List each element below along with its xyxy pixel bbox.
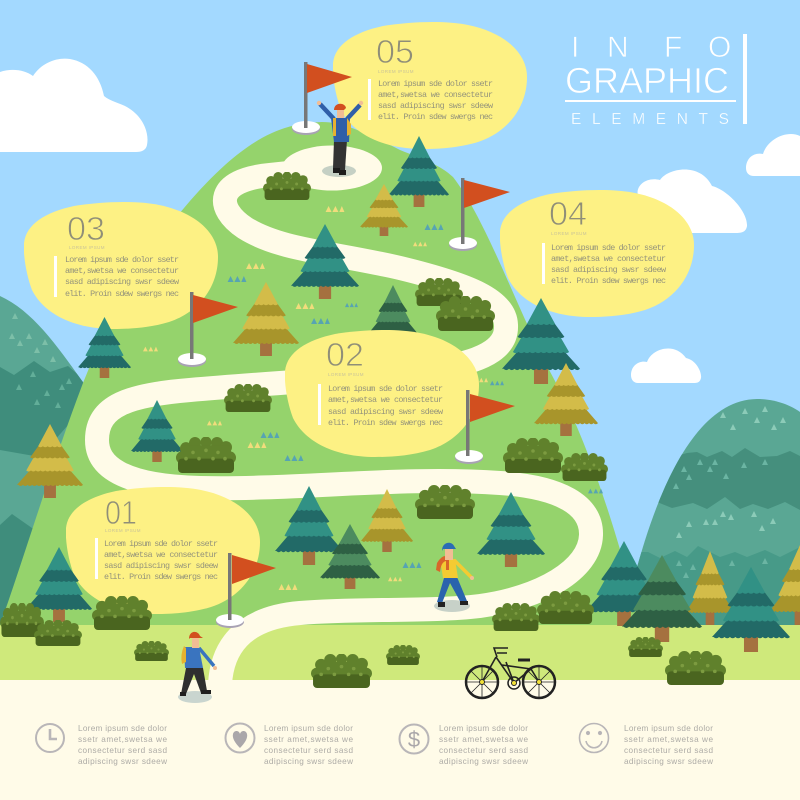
accent bar 01 [95, 538, 98, 579]
cloud: small centre right [631, 348, 701, 383]
panel: step 05 [333, 22, 527, 149]
flag 04 [449, 178, 510, 251]
bushes [0, 172, 726, 688]
hiker walking on trail [434, 543, 474, 612]
accent bar 05 [368, 79, 371, 120]
panel: step 02 [285, 330, 479, 457]
icon: dollar: $ [408, 727, 420, 752]
label 05: LOREM IPSUM [378, 69, 414, 74]
icon: dollar [400, 724, 428, 754]
title: GRAPHIC [565, 60, 729, 101]
text 05: sasd adipiscing swsr sdeew [378, 101, 493, 111]
text 05: amet,swetsa we consectetur [378, 90, 493, 100]
footer text 3: consectetur serd sasd [439, 746, 528, 755]
text 02: Lorem ipsum sde dolor ssetr [328, 384, 443, 394]
text 02: elit. Proin sdew swergs nec [328, 418, 443, 428]
label 04: LOREM IPSUM [551, 231, 587, 236]
flag 01 [216, 553, 276, 628]
footer text 3 [439, 724, 528, 766]
flag 05 [292, 62, 352, 135]
accent bar 04 [542, 243, 545, 284]
cloud: top left [0, 59, 148, 152]
text 02 [328, 384, 443, 428]
text 03: Lorem ipsum sde dolor ssetr [65, 255, 179, 265]
text 04: Lorem ipsum sde dolor ssetr [551, 243, 666, 253]
background mountains right [638, 399, 800, 625]
footer text 2 [264, 724, 353, 766]
winding trail [97, 146, 591, 684]
footer text 1: consectetur serd sasd [78, 746, 167, 755]
text 01 [104, 539, 218, 582]
cloud: right [638, 170, 747, 233]
flag 02 [455, 390, 515, 464]
text 05: elit. Proin sdew swergs nec [378, 112, 493, 122]
footer text 4: ssetr amet,swetsa we [624, 735, 713, 744]
hiker on foreground trail [178, 632, 217, 703]
text 03: elit. Proin sdew swergs nec [65, 289, 179, 299]
tree group: pines on hill [17, 136, 598, 622]
footer text 1: ssetr amet,swetsa we [78, 735, 167, 744]
panel: step 03 [24, 202, 218, 329]
title: ELEMENTS [571, 111, 729, 128]
text 03: sasd adipiscing swsr sdeew [65, 277, 179, 287]
icon: clock [36, 724, 64, 752]
tree group: foreground right [586, 541, 800, 652]
flag 03 [178, 292, 238, 367]
text 03: amet,swetsa we consectetur [65, 266, 179, 276]
footer text 4: Lorem ipsum sde dolor [624, 724, 713, 733]
footer text 3: ssetr amet,swetsa we [439, 735, 528, 744]
text 02: sasd adipiscing swsr sdeew [328, 407, 443, 417]
text 01: amet,swetsa we consectetur [104, 550, 218, 560]
text 02: amet,swetsa we consectetur [328, 395, 443, 405]
footer text 3: adipiscing swsr sdeew [439, 757, 528, 766]
text 05 [378, 79, 493, 122]
footer text 2: consectetur serd sasd [264, 746, 353, 755]
icon: smiley [580, 724, 608, 752]
footer text 1: Lorem ipsum sde dolor [78, 724, 167, 733]
label 02: LOREM IPSUM [328, 372, 364, 377]
footer text 4: adipiscing swsr sdeew [624, 757, 713, 766]
small grass triangles [143, 206, 603, 590]
icon: bicycle [466, 648, 555, 698]
footer text 2: Lorem ipsum sde dolor [264, 724, 353, 733]
title [565, 31, 747, 128]
title: INFO [571, 31, 731, 64]
text 01: Lorem ipsum sde dolor ssetr [104, 539, 218, 549]
panel: step 04 [500, 190, 694, 317]
number 04: 04 [549, 195, 587, 232]
text 05: Lorem ipsum sde dolor ssetr [378, 79, 493, 89]
text 03 [65, 255, 179, 299]
number 05: 05 [376, 33, 414, 70]
number 02: 02 [326, 336, 364, 373]
hiker at summit with arms raised [317, 101, 363, 177]
text 04 [551, 243, 666, 286]
main hill [0, 122, 640, 625]
tree behind step 02 panel [369, 285, 417, 343]
accent bar 02 [318, 384, 321, 425]
icon: heart [226, 724, 254, 752]
foreground meadow [0, 625, 800, 681]
number 03: 03 [67, 210, 105, 247]
number 01: 01 [105, 494, 137, 531]
text 04: amet,swetsa we consectetur [551, 254, 666, 264]
text 01: elit. Proin sdew swergs nec [104, 572, 218, 582]
background mountains left [0, 296, 84, 625]
cloud: far right [746, 134, 800, 176]
panel: step 01 [66, 487, 260, 614]
footer text 4 [624, 724, 713, 766]
ground strip [0, 680, 800, 800]
footer text 2: ssetr amet,swetsa we [264, 735, 353, 744]
text 04: sasd adipiscing swsr sdeew [551, 265, 666, 275]
footer text 3: Lorem ipsum sde dolor [439, 724, 528, 733]
footer text 4: consectetur serd sasd [624, 746, 713, 755]
label 03: LOREM IPSUM [69, 245, 105, 250]
label 01: LOREM IPSUM [105, 528, 141, 533]
text 04: elit. Proin sdew swergs nec [551, 276, 666, 286]
footer text 2: adipiscing swsr sdeew [264, 757, 353, 766]
accent bar 03 [54, 256, 57, 297]
text 01: sasd adipiscing swsr sdeew [104, 561, 218, 571]
footer text 1 [78, 724, 167, 766]
footer text 1: adipiscing swsr sdeew [78, 757, 167, 766]
